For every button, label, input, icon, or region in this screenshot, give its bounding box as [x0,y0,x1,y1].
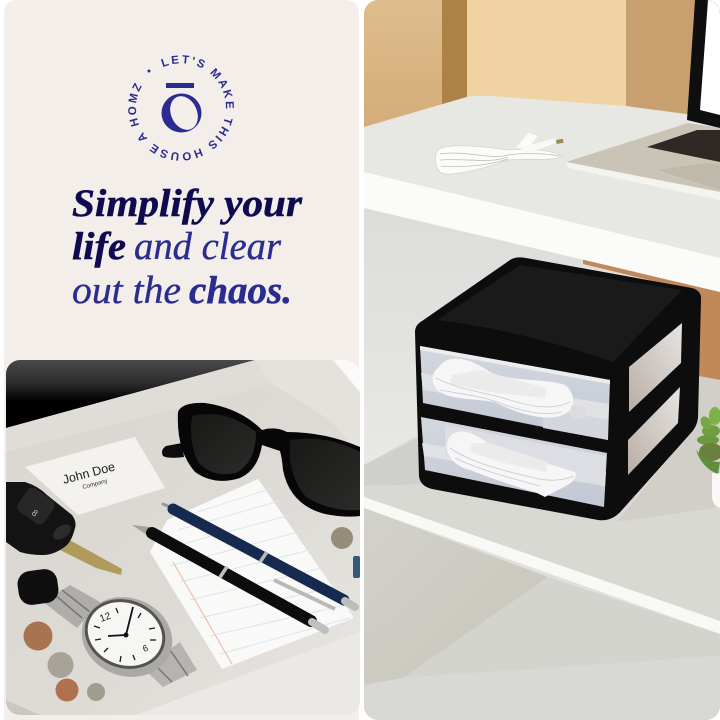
icon: wristwatch [16,567,197,689]
lower shelf surface [364,376,720,621]
title [72,182,303,312]
watch dial numbers: 12 [98,611,113,625]
unit shadow on right [617,376,720,522]
lower wall under desk [364,445,399,464]
logo mark [162,83,203,134]
card name: John Doe [61,460,117,487]
under-shelf lighter face [403,577,720,678]
side window bottom [628,387,680,475]
dark object at back of tray [6,360,255,428]
top drawer front [420,346,610,440]
shelf front edge [364,172,720,292]
drawer top recess [437,265,682,362]
storage drawer unit [415,257,701,520]
title: Simplify your [72,182,303,225]
bottom drawer cable coil [447,432,576,497]
blue pen [163,504,355,609]
bottom drawer front [421,417,607,507]
icon: car key [6,482,122,575]
logo circular tagline: LET'S MAKE THIS HOUSE A HOMZ [128,55,234,161]
icon: wristwatch: 6 [141,643,149,654]
business card [25,437,165,515]
back wall panels [364,0,696,135]
black pen [132,525,325,630]
title: out the [72,269,181,312]
top drawer cable coil [433,358,585,419]
icon: usb cable on desk [435,133,564,174]
logo dot [148,70,150,72]
card company: Company [82,478,108,491]
tray front lip [136,662,280,715]
panel: cream background [4,0,359,720]
title: chaos. [189,269,292,312]
coins [24,527,360,702]
panel: drawer on shelf photo [364,0,720,720]
wood back wall strip [583,255,720,380]
shelf shadow wedge [364,437,425,486]
drawer body [415,257,701,520]
notepad [150,479,354,669]
side window top [629,323,682,412]
icon: sunglasses [162,403,360,517]
logo badge [128,55,234,161]
tray back right corner [256,360,342,406]
desk top surface [364,96,696,135]
under-shelf lower wedge [364,508,548,685]
title: and clear [134,225,282,268]
icon: car key: 8 [30,508,40,519]
title: life [72,225,126,268]
panel: organized tray photo [6,360,360,715]
lower shelf front edge [364,497,720,634]
watch fob [18,569,58,605]
icon: laptop [566,0,720,200]
icon: potted plant [696,407,720,508]
floor area [364,706,720,720]
